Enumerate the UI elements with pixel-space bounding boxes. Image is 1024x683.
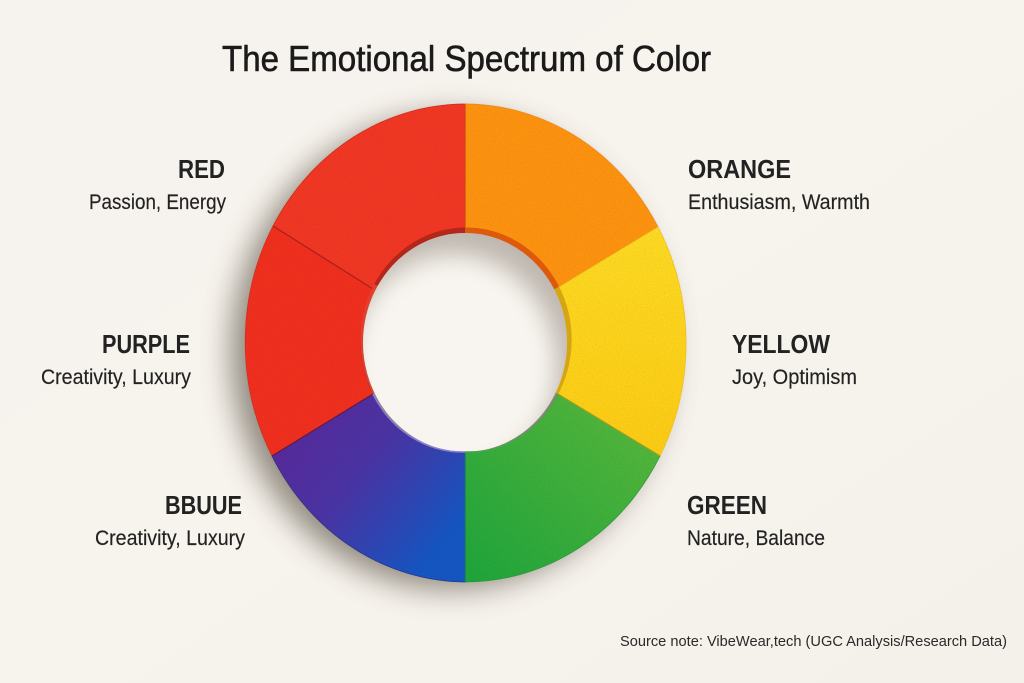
label: yellow: YELLOW [732,329,830,359]
segment: blue [272,394,465,582]
donut chart [231,103,687,589]
segment: green [465,394,660,582]
wheel drop shadow [231,115,669,589]
label: red: RED [178,154,225,184]
label: purple: PURPLE [102,329,190,359]
label: orange: Enthusiasm, Warmth [688,191,870,214]
label: yellow [732,329,857,389]
label: yellow: Joy, Optimism [732,366,857,389]
hole rim: blue [373,394,465,452]
label: red: Passion, Energy [89,191,226,214]
label: green: Nature, Balance [687,527,825,550]
surface grain [244,103,687,582]
label: green [687,490,825,550]
wall: top red [374,228,465,286]
label: blue: BBUUE [165,490,242,520]
label: purple [41,329,191,389]
label: red [89,154,226,214]
hole rim: green [465,394,558,452]
divider lines [272,104,660,582]
label: green: GREEN [687,490,767,520]
segment: orange [465,104,658,287]
segment: red [273,104,465,289]
hole inner shadow [363,233,567,438]
source note: Source note: VibeWear,tech (UGC Analysis/Research Data) [620,634,1007,650]
label: blue [95,490,245,550]
label: purple: Creativity, Luxury [41,366,191,389]
segment: yellow [558,227,686,456]
centre hole [363,233,567,453]
inner walls [360,228,572,394]
label: blue: Creativity, Luxury [95,527,245,550]
wall: yellow [554,286,572,394]
wall: orange [465,228,559,290]
label: orange: ORANGE [688,154,791,184]
wall: left red [360,284,378,394]
title: The Emotional Spectrum of Color [222,38,711,79]
segment: purple (drawn red) [245,226,373,456]
label: orange [688,154,870,214]
